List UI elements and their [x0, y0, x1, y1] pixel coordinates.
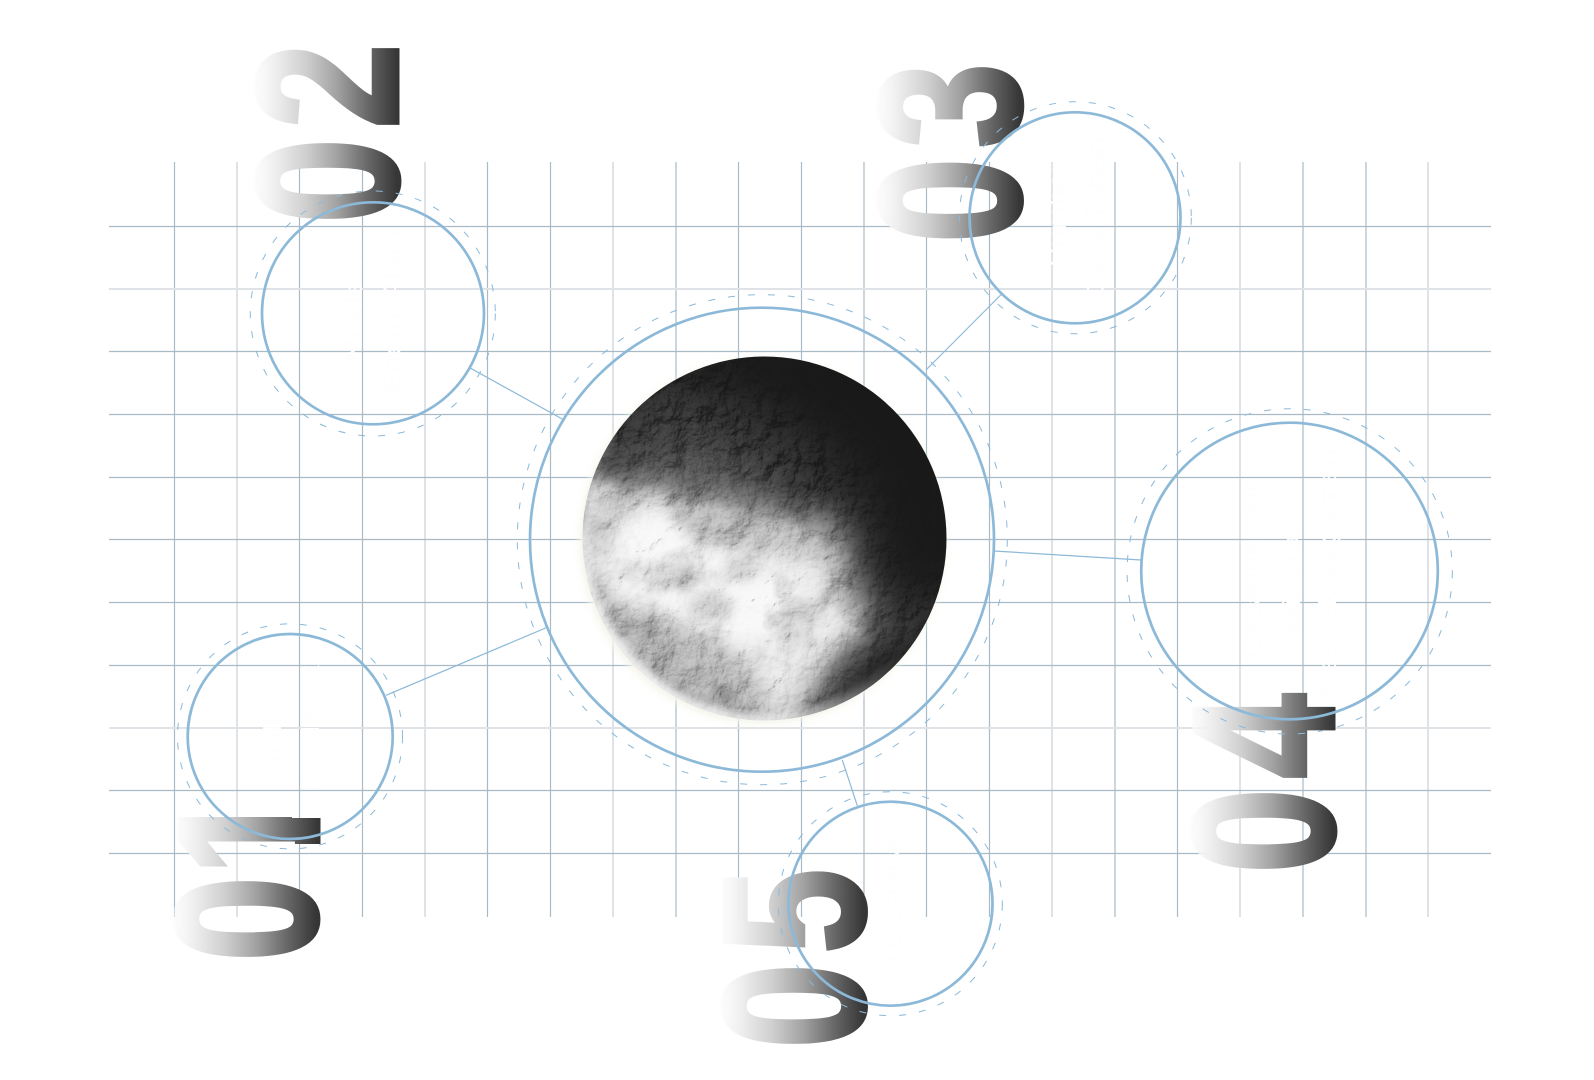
panel: circle 02 — [250, 191, 495, 436]
white label 01 — [259, 664, 325, 792]
background grid — [109, 162, 1491, 917]
number 02: 02 — [214, 33, 440, 223]
white label 03: Sumber — [1044, 163, 1072, 267]
white label 04 — [1239, 448, 1342, 697]
white label 02: Nukleus — [340, 243, 368, 363]
white label 05: Kelestarian — [879, 823, 907, 968]
number 01: 0 — [133, 866, 359, 961]
white label 02 — [340, 230, 407, 393]
white label 04: Mineral — [1278, 527, 1306, 633]
white label 01: Bioplastik — [297, 664, 325, 792]
white label 02: Energi Alam — [379, 230, 407, 393]
number 01 — [174, 817, 320, 957]
number 01: 1 — [135, 780, 361, 875]
white label 03: Daya Tahan — [1082, 137, 1110, 303]
white label 04: Keanekaragaman — [1314, 448, 1342, 697]
white label 04: Cadangan Air — [1239, 483, 1267, 657]
icon: planet — [575, 355, 950, 727]
connector lines — [386, 294, 1141, 806]
central ring — [517, 295, 1007, 785]
number 04: 04 — [1150, 683, 1376, 873]
panel: circle 01 — [178, 624, 402, 849]
number 03: 03 — [836, 53, 1062, 242]
panel: circle 05 — [778, 792, 1002, 1016]
white label 03 — [1044, 137, 1110, 303]
panel: circle 04 — [1127, 409, 1452, 734]
white label 01: Vanilkot — [259, 687, 287, 787]
number 05: 05 — [680, 858, 906, 1048]
panel: circle 03 — [959, 102, 1191, 334]
